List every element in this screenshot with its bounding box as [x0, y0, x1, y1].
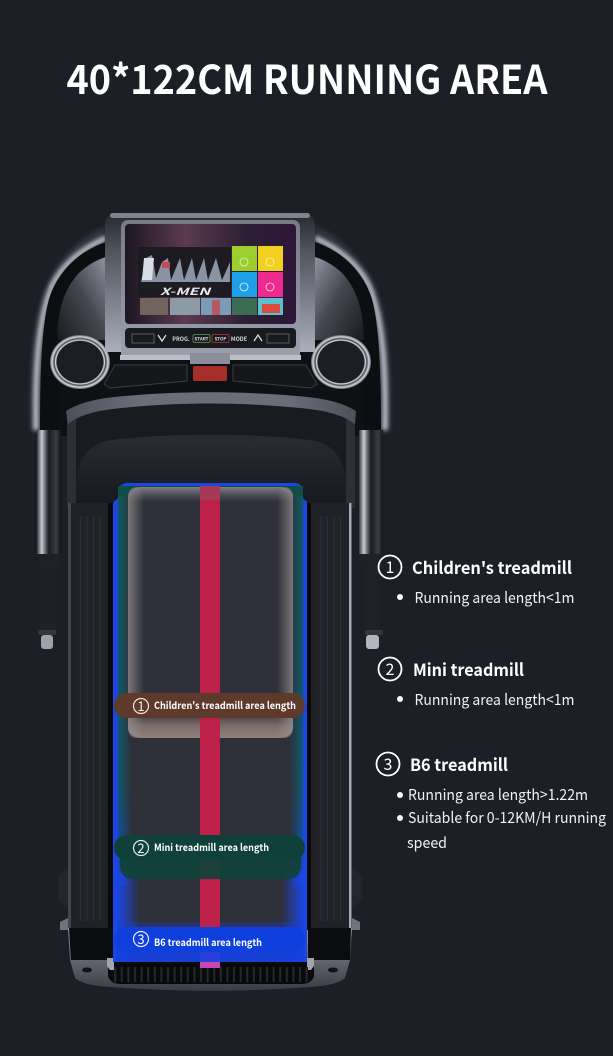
- rear base: [68, 928, 352, 991]
- right post: [359, 430, 383, 649]
- side pads: [104, 365, 317, 388]
- label pill 2: [114, 835, 305, 860]
- motor hood: [67, 396, 355, 508]
- feature 2: mini treadmill: Running area length<1m: [414, 689, 574, 710]
- control panel: [125, 328, 296, 348]
- control panel: PROG.: [172, 335, 190, 343]
- label pill 2: 2: [137, 838, 145, 857]
- feature 1: children's treadmill: 1: [386, 554, 394, 578]
- teal side glow: [118, 486, 303, 886]
- feature 3: B6 treadmill: [376, 751, 607, 853]
- control panel: START: [194, 336, 209, 342]
- video thumbnails: [140, 298, 283, 315]
- right side rail: [306, 503, 352, 930]
- control panel: STOP: [215, 336, 226, 342]
- label pill 3: [114, 927, 305, 952]
- feature 3: B6 treadmill: speed: [407, 832, 447, 853]
- feature 1: children's treadmill: Running area length<1m: [414, 587, 574, 608]
- feature 1: children's treadmill: [378, 554, 574, 608]
- blue lower glow: [118, 870, 303, 962]
- hood side columns: [67, 414, 355, 508]
- feature 2: mini treadmill: 2: [386, 656, 395, 680]
- red centre line: [200, 486, 220, 968]
- feature 1: children's treadmill: Children's treadmill: [412, 554, 572, 579]
- X-MEN text: X-MEN: [160, 283, 212, 298]
- label pill 3: B6 treadmill area length: [154, 934, 262, 949]
- feature 3: B6 treadmill: Suitable for 0-12KM/H running: [408, 807, 607, 828]
- curved crossbar: [66, 392, 356, 424]
- feature 2: mini treadmill: [378, 656, 574, 710]
- label pill 1: Children's treadmill area length: [154, 697, 296, 712]
- feature 2: mini treadmill: Mini treadmill: [413, 656, 524, 681]
- feature 3: B6 treadmill: B6 treadmill: [410, 751, 508, 776]
- right dial: [311, 335, 371, 389]
- left handle arch: [30, 226, 106, 432]
- label pill 3: 3: [137, 929, 145, 948]
- blue lower area: [116, 945, 304, 962]
- label pill 1: 1: [137, 696, 145, 715]
- left post: [37, 430, 61, 649]
- tablet console: [105, 213, 315, 364]
- console lower body: [58, 340, 364, 436]
- right handle arch: [315, 226, 391, 432]
- label pill 2: Mini treadmill area length: [154, 839, 269, 854]
- screen: [125, 224, 296, 324]
- feature 3: B6 treadmill: Running area length>1.22m: [408, 784, 588, 805]
- side brackets: [58, 868, 362, 930]
- label pill 1: [114, 693, 305, 718]
- left side rail: [68, 503, 114, 930]
- feature 3: B6 treadmill: 3: [384, 751, 392, 775]
- treadmill illustration: [30, 213, 391, 991]
- children's treadmill area: [128, 487, 293, 738]
- left dial: [50, 335, 110, 389]
- colour tiles: [232, 246, 283, 297]
- running belt: [114, 500, 307, 962]
- title: 40*122CM RUNNING AREA: [66, 48, 548, 106]
- mini area shaded end: [120, 850, 301, 879]
- blue B6 area frame: [113, 483, 307, 962]
- inner hood panel: [76, 435, 346, 508]
- control panel: MODE: [231, 335, 248, 343]
- red safety button: [193, 366, 227, 381]
